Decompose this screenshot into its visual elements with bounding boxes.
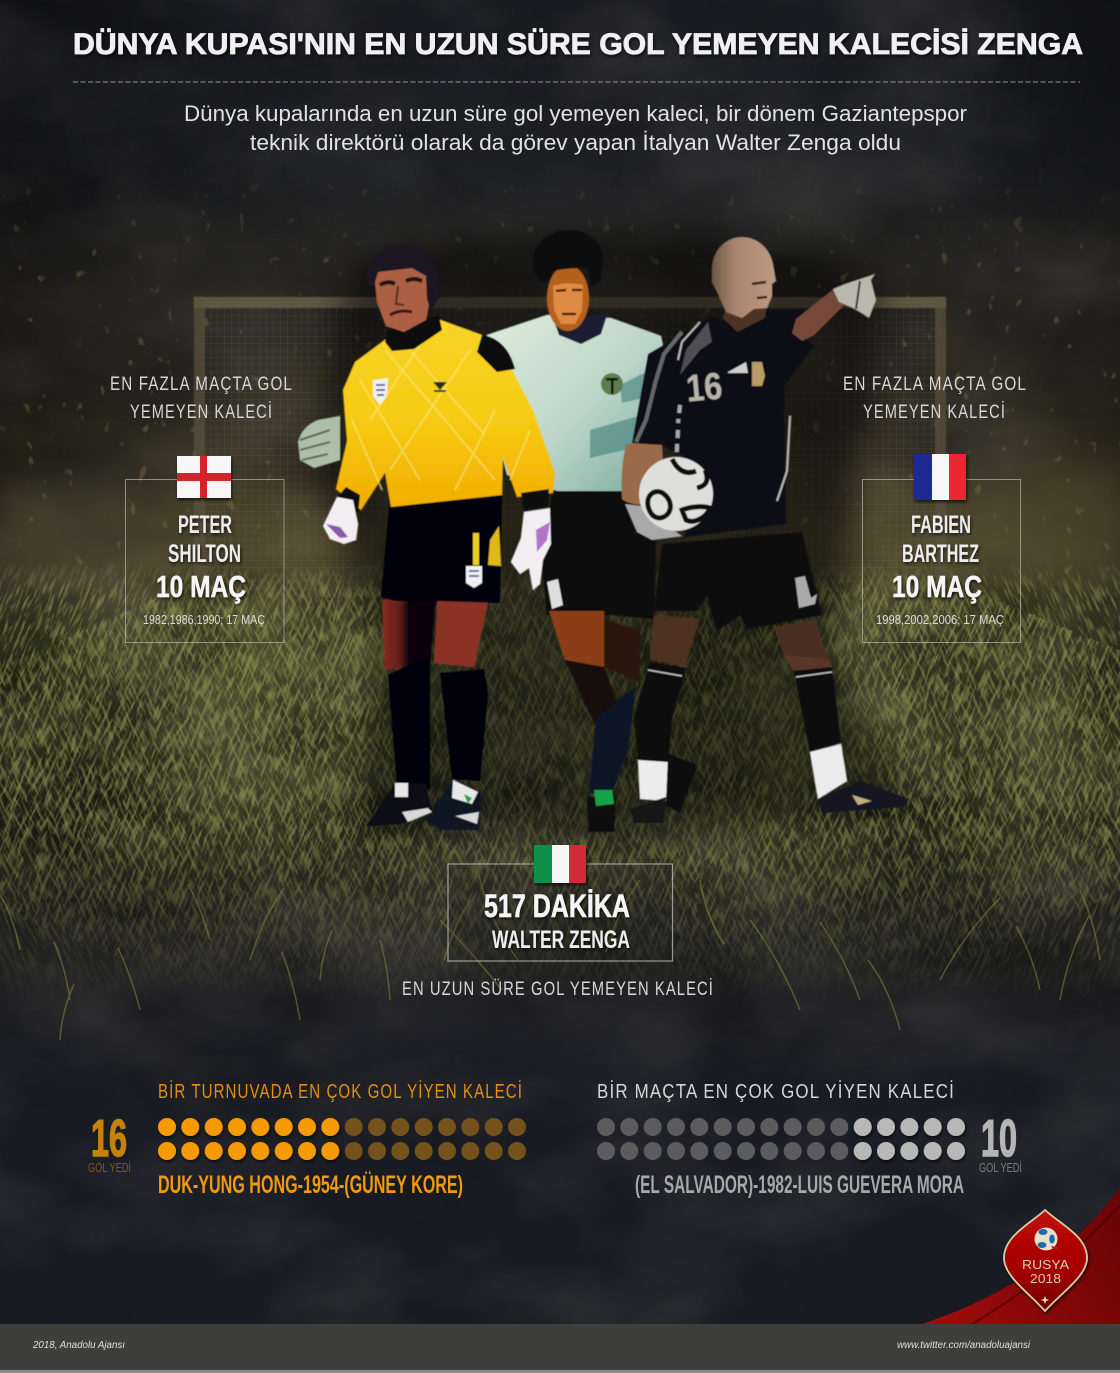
- boots: [366, 782, 432, 826]
- title: DÜNYA KUPASI'NIN EN UZUN SÜRE GOL YEMEYEN KALECİSİ ZENGA: [73, 28, 1083, 61]
- big number 16: 16: [91, 1110, 127, 1168]
- panel: Peter Shilton record: SHILTON: [168, 540, 241, 568]
- panel: most goals conceded in a tournament: [88, 1080, 526, 1199]
- dot chart: 10 goals: [597, 1118, 965, 1160]
- panel: Walter Zenga record: 517 DAKİKA: [484, 888, 630, 924]
- logo: Rusya 2018 badge: RUSYA: [1022, 1257, 1069, 1272]
- panel: Peter Shilton record: [110, 374, 293, 642]
- panel: Fabien Barthez record: [843, 374, 1027, 642]
- red corner ribbon: [922, 1188, 1120, 1324]
- big number 10: 10: [981, 1110, 1017, 1168]
- subtitle: Dünya kupalarında en uzun süre gol yemeyen kaleci, bir dönem Gaziantepspor: [184, 101, 967, 126]
- player shadow glow: [310, 230, 905, 845]
- jersey: [336, 319, 555, 510]
- panel: Fabien Barthez record: 1998,2002,2006; 17 MAÇ: [876, 612, 1004, 627]
- panel: Walter Zenga record: WALTER ZENGA: [492, 926, 630, 954]
- logo: Rusya 2018 badge: [1004, 1210, 1087, 1311]
- footer bar: 2018, Anadolu Ajansı: [32, 1340, 125, 1351]
- shorts: [541, 489, 656, 619]
- pointing arm and glove: [792, 289, 846, 341]
- footer bar: [0, 1324, 1120, 1373]
- panel: Fabien Barthez record: EN FAZLA MAÇTA GOL: [843, 374, 1027, 395]
- panel: Fabien Barthez record: YEMEYEN KALECİ: [863, 402, 1006, 423]
- legs: [650, 615, 699, 667]
- player: Fabien Barthez (right, black kit): [622, 237, 909, 823]
- shorts: [654, 532, 822, 631]
- head: [547, 265, 589, 331]
- panel: Fabien Barthez record: 10 MAÇ: [892, 569, 982, 604]
- players group: [298, 230, 909, 845]
- subtitle: [184, 101, 967, 155]
- panel: most goals conceded in a tournament: DUK-YUNG HONG-1954-(GÜNEY KORE): [158, 1170, 463, 1199]
- panel: Fabien Barthez record: BARTHEZ: [902, 540, 979, 568]
- goal frame and net: [194, 297, 946, 596]
- footer bar: www.twitter.com/anadoluajansi: [897, 1340, 1031, 1351]
- player: Fabien Barthez (right, black kit): 16: [685, 366, 724, 411]
- head: [723, 300, 767, 332]
- panel: Peter Shilton record: EN FAZLA MAÇTA GOL: [110, 374, 293, 395]
- panel: Fabien Barthez record: FABIEN: [911, 511, 971, 539]
- gloves: [323, 497, 358, 544]
- panel: Walter Zenga record: [402, 845, 714, 1000]
- panel: most goals conceded in a match: BİR MAÇTA EN ÇOK GOL YİYEN KALECİ: [597, 1080, 955, 1103]
- player: Walter Zenga (centre): [298, 230, 667, 832]
- panel: Peter Shilton record: YEMEYEN KALECİ: [130, 402, 273, 423]
- legs: [382, 600, 436, 670]
- shorts: [381, 495, 502, 603]
- dot chart: 16 goals: [158, 1118, 526, 1160]
- panel: Peter Shilton record: 1982,1986,1990; 17 MAÇ: [143, 612, 265, 627]
- jersey: [632, 309, 814, 537]
- head: [374, 265, 430, 332]
- grass blades in the foreground: [2, 870, 1100, 1040]
- panel: most goals conceded in a tournament: BİR TURNUVADA EN ÇOK GOL YİYEN KALECİ: [158, 1080, 523, 1103]
- left arm: [622, 442, 664, 505]
- panel: Peter Shilton record: 10 MAÇ: [156, 569, 246, 604]
- panel: most goals conceded in a tournament: GOL YEDİ: [88, 1160, 131, 1175]
- player: Peter Shilton (left, yellow kit): [323, 245, 555, 830]
- icon: Italy flag: [534, 845, 586, 883]
- legs: [549, 611, 604, 667]
- shirt: [479, 315, 667, 491]
- icon: England flag: [177, 456, 231, 498]
- panel: most goals conceded in a match: GOL YEDİ: [979, 1160, 1022, 1175]
- panel: Walter Zenga record: EN UZUN SÜRE GOL YEMEYEN KALECİ: [402, 979, 714, 1000]
- icon: France flag: [914, 454, 966, 500]
- logo: Rusya 2018 badge: 2018: [1030, 1271, 1061, 1286]
- icon: football: [639, 457, 713, 531]
- panel: Peter Shilton record: PETER: [178, 511, 232, 539]
- subtitle: teknik direktörü olarak da görev yapan İtalyan Walter Zenga oldu: [250, 130, 901, 155]
- panel: most goals conceded in a match: [597, 1080, 1022, 1199]
